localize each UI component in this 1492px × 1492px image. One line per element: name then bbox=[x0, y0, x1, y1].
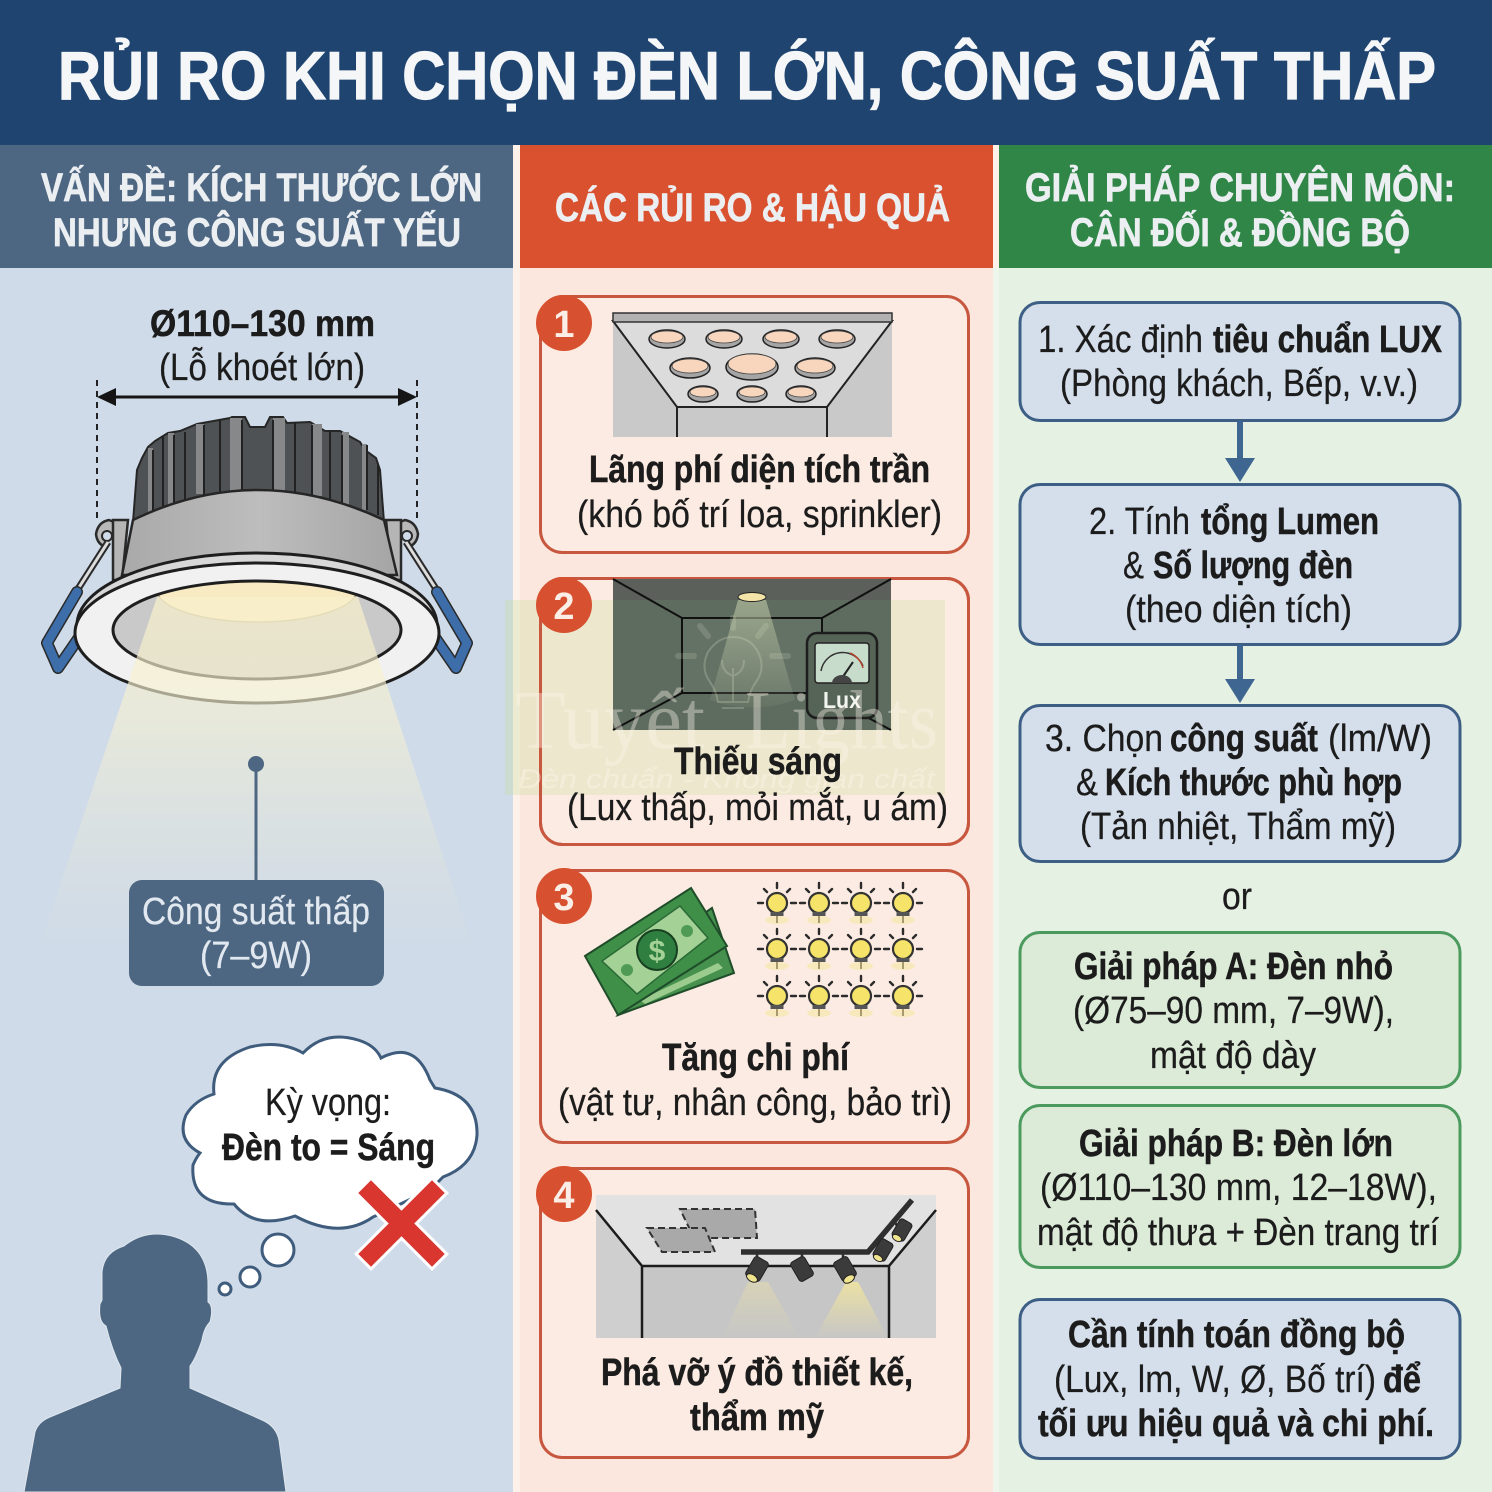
step 3: 3. Chọn bbox=[1045, 718, 1163, 760]
text: risk 2: Thiếu sáng bbox=[674, 741, 842, 783]
text: risk 4: Phá vỡ ý đồ thiết kế, bbox=[601, 1352, 913, 1394]
diameter label: (Lỗ khoét lớn) bbox=[159, 346, 365, 389]
header: solution bbox=[999, 145, 1492, 268]
icon: downlight bbox=[47, 417, 467, 703]
text: risk 3: Tăng chi phí bbox=[662, 1037, 850, 1079]
watermark logo and text: Lights bbox=[745, 674, 938, 767]
icon: red cross bbox=[371, 1193, 432, 1254]
panel: risk 4 bbox=[540, 1168, 968, 1458]
watermark logo and text: Tuyết bbox=[515, 674, 705, 767]
watermark logo and text bbox=[515, 618, 938, 794]
right clip bbox=[386, 520, 467, 668]
step 3: (Tản nhiệt, Thẩm mỹ) bbox=[1080, 806, 1396, 848]
step 2: Số lượng đèn bbox=[1153, 545, 1353, 587]
step 2 bbox=[1020, 484, 1460, 644]
step 1: tiêu chuẩn LUX bbox=[1213, 319, 1443, 361]
text: or: or bbox=[1222, 876, 1252, 918]
text: risk 4: thẩm mỹ bbox=[690, 1397, 824, 1439]
step 3 bbox=[1020, 706, 1460, 862]
icon: track lights bbox=[741, 1200, 913, 1285]
thought bubble bbox=[183, 1037, 477, 1228]
solution A: Giải pháp A: Đèn nhỏ bbox=[1074, 946, 1393, 988]
conclusion: để bbox=[1383, 1359, 1421, 1401]
step 1 bbox=[1020, 302, 1460, 420]
header: problem: NHƯNG CÔNG SUẤT YẾU bbox=[53, 209, 461, 255]
callout: low power: (7–9W) bbox=[200, 935, 312, 977]
lamp body bbox=[122, 490, 397, 575]
text: risk 3 bbox=[558, 1037, 952, 1124]
thought bubble: Đèn to = Sáng bbox=[222, 1127, 435, 1169]
icon: banknotes: $ bbox=[649, 935, 666, 968]
step 2: tổng Lumen bbox=[1201, 501, 1379, 543]
badge 2 bbox=[536, 577, 592, 633]
diameter label: Ø110–130 mm bbox=[150, 303, 375, 344]
badge 1: 1 bbox=[553, 304, 575, 346]
title bbox=[0, 0, 1492, 145]
icon: grid of bulbs bbox=[758, 883, 922, 1017]
step 2: (theo diện tích) bbox=[1125, 589, 1352, 631]
icon: banknotes bbox=[585, 888, 734, 1015]
diameter arrow bbox=[97, 380, 417, 520]
badge 3: 3 bbox=[553, 877, 575, 919]
icon: lux meter bbox=[807, 633, 877, 718]
solution A bbox=[1020, 932, 1460, 1088]
solution B: Giải pháp B: Đèn lớn bbox=[1079, 1123, 1393, 1165]
step 1: (Phòng khách, Bếp, v.v.) bbox=[1060, 363, 1418, 405]
solution A: (Ø75–90 mm, 7–9W), bbox=[1073, 990, 1394, 1032]
heat sink bbox=[133, 417, 384, 522]
text: risk 3: (vật tư, nhân công, bảo trì) bbox=[558, 1082, 952, 1124]
callout: low power bbox=[129, 880, 384, 986]
step 3: (lm/W) bbox=[1328, 718, 1432, 760]
conclusion: (Lux, lm, W, Ø, Bố trí) bbox=[1054, 1359, 1376, 1401]
flange bbox=[75, 553, 439, 703]
header: risks bbox=[520, 145, 993, 268]
left clip bbox=[47, 520, 128, 668]
badge 4 bbox=[536, 1166, 592, 1222]
conclusion: Cần tính toán đồng bộ bbox=[1068, 1314, 1405, 1356]
header: problem: VẤN ĐỀ: KÍCH THƯỚC LỚN bbox=[41, 164, 482, 210]
watermark logo and text: Đèn chuẩn - Không gian chất bbox=[518, 764, 937, 794]
step 2: & bbox=[1123, 545, 1144, 587]
arrow: step 1 to 2 bbox=[1225, 421, 1255, 482]
light beam bbox=[40, 597, 472, 945]
panel: problem illustration bbox=[24, 303, 477, 1492]
header: solution: CÂN ĐỐI & ĐỒNG BỘ bbox=[1070, 209, 1410, 255]
illustration: dim room bbox=[613, 579, 891, 730]
text: risk 1 bbox=[577, 449, 942, 536]
callout: low power: Công suất thấp bbox=[142, 891, 370, 933]
arrow: step 2 to 3 bbox=[1225, 645, 1255, 703]
reflector opening bbox=[112, 580, 402, 680]
step 3: & bbox=[1076, 762, 1098, 804]
badge 4: 4 bbox=[553, 1175, 575, 1217]
icon: lux meter: Lux bbox=[823, 687, 861, 713]
text: risk 4 bbox=[601, 1352, 913, 1439]
badge 1 bbox=[536, 295, 592, 351]
panel: risk 3 bbox=[540, 870, 968, 1142]
person silhouette bbox=[24, 1234, 286, 1492]
thought bubble dots bbox=[219, 1234, 294, 1295]
step 3: công suất bbox=[1170, 718, 1318, 760]
badge 2: 2 bbox=[553, 586, 575, 628]
conclusion bbox=[1020, 1300, 1460, 1458]
step 3: Kích thước phù hợp bbox=[1105, 762, 1402, 804]
watermark tint bbox=[505, 600, 945, 795]
illustration: cluttered ceiling bbox=[596, 1195, 936, 1338]
solution B bbox=[1020, 1106, 1460, 1268]
text: risk 1: (khó bố trí loa, sprinkler) bbox=[577, 494, 942, 536]
badge 3 bbox=[536, 868, 592, 924]
card outline bbox=[540, 578, 968, 844]
step 2: 2. Tính bbox=[1089, 501, 1190, 543]
step 1: 1. Xác định bbox=[1038, 319, 1203, 361]
text: risk 2 bbox=[567, 741, 948, 829]
pointer line bbox=[248, 756, 264, 880]
solution B: mật độ thưa + Đèn trang trí bbox=[1037, 1212, 1439, 1254]
panel: risk 2 bbox=[505, 578, 968, 844]
text: risk 1: Lãng phí diện tích trần bbox=[589, 449, 930, 491]
solution A: mật độ dày bbox=[1150, 1035, 1316, 1077]
thought bubble: Kỳ vọng: bbox=[265, 1082, 391, 1124]
text: risk 2: (Lux thấp, mỏi mắt, u ám) bbox=[567, 786, 948, 829]
diameter label bbox=[150, 303, 375, 389]
illustration: crowded ceiling bbox=[613, 313, 892, 437]
solution B: (Ø110–130 mm, 12–18W), bbox=[1040, 1167, 1437, 1209]
header: risks: CÁC RỦI RO & HẬU QUẢ bbox=[555, 184, 950, 230]
header: problem bbox=[0, 145, 513, 268]
panel: risk 1 bbox=[540, 296, 968, 552]
